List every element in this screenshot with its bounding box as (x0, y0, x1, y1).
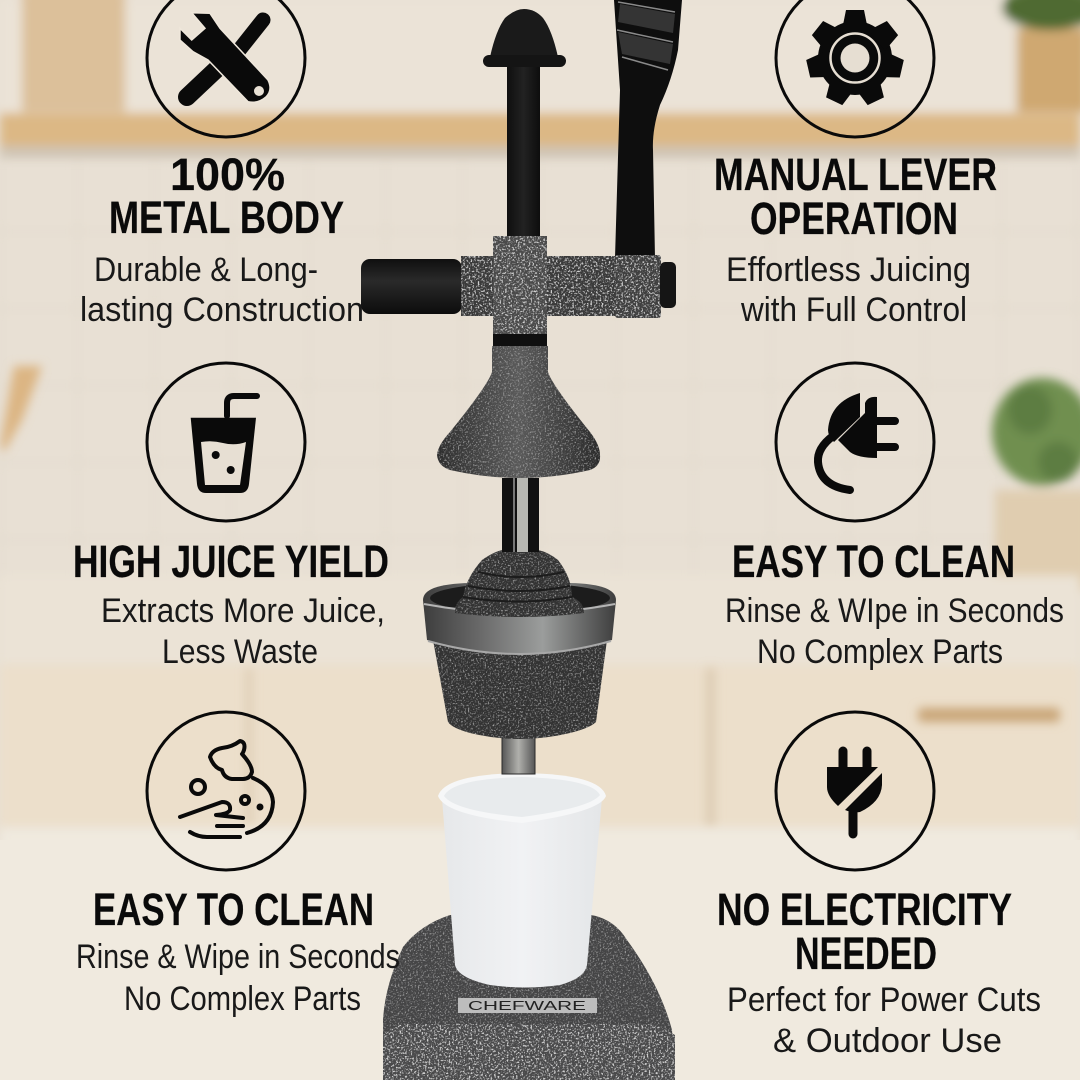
collar (493, 333, 547, 346)
shaft (502, 478, 539, 552)
horizontal arm (361, 255, 676, 318)
icon: gear (776, 0, 934, 137)
brand label (458, 998, 597, 1013)
white cup (438, 773, 606, 988)
brand label: CHEFWARE (468, 998, 587, 1013)
description: Effortless Juicing (726, 251, 971, 289)
feature: manual lever (714, 0, 997, 329)
feature: high juice yield (73, 363, 389, 671)
juicer product illustration (361, 0, 682, 1080)
heading: EASY TO CLEAN (93, 884, 374, 935)
icon: juice glass with straw (147, 363, 305, 521)
feature: easy to clean (plug) (725, 363, 1064, 671)
juice bowl body (433, 640, 607, 739)
icon: plug (776, 712, 934, 870)
description: Durable & Long- (94, 251, 318, 289)
icon: wrench and screwdriver (147, 0, 305, 137)
centre block (493, 236, 547, 334)
heading: METAL BODY (109, 192, 344, 243)
base plate (383, 915, 675, 1080)
description: Extracts More Juice, (101, 592, 385, 630)
press cone (437, 346, 600, 478)
vertical rod and knob (483, 9, 566, 238)
description: lasting Construction (80, 291, 364, 329)
heading: OPERATION (750, 193, 958, 244)
lever handle (614, 0, 682, 258)
description: No Complex Parts (124, 980, 361, 1018)
feature: metal body (80, 0, 364, 329)
feature: no electricity (717, 712, 1041, 1060)
feature: easy to clean (soap) (76, 712, 400, 1018)
heading: NEEDED (795, 928, 937, 979)
bowl rim (423, 583, 616, 654)
description: Less Waste (162, 633, 318, 671)
description: Rinse & Wipe in Seconds (76, 938, 400, 976)
heading: HIGH JUICE YIELD (73, 536, 389, 587)
heading: MANUAL LEVER (714, 149, 997, 200)
icon: power plug with cord (776, 363, 934, 521)
description: Perfect for Power Cuts (727, 981, 1041, 1019)
spout (502, 738, 535, 774)
description: No Complex Parts (757, 633, 1003, 671)
description: with Full Control (740, 291, 967, 329)
icon: soap and hand (147, 712, 305, 870)
reamer cone (455, 550, 584, 617)
description: & Outdoor Use (773, 1022, 1002, 1060)
heading: 100% (170, 149, 285, 200)
